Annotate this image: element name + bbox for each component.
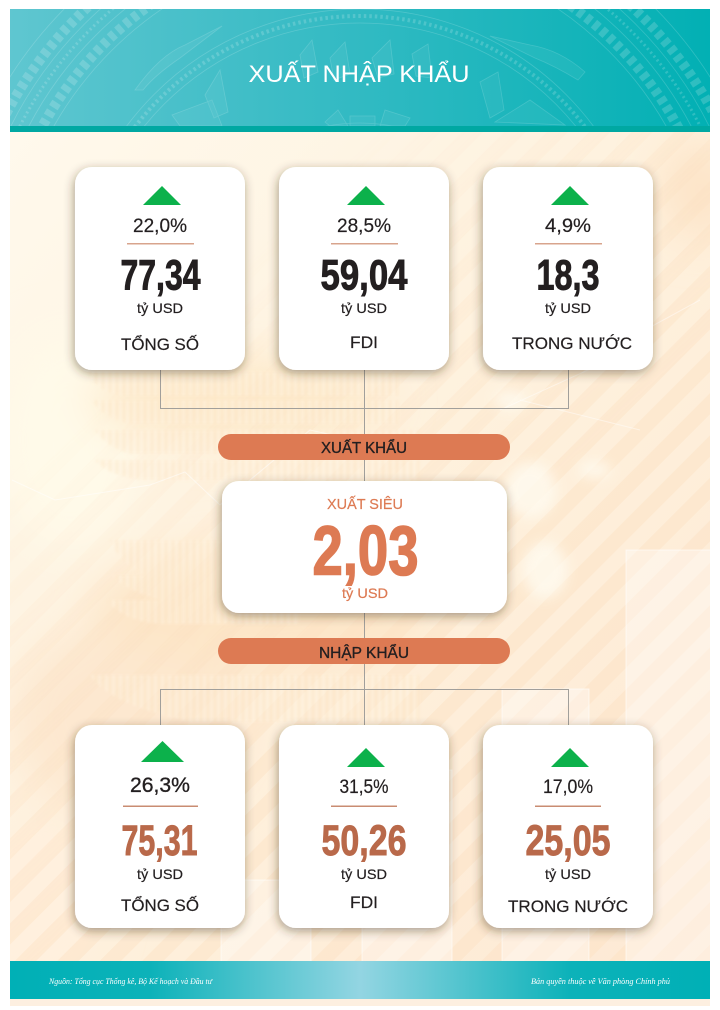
translucent bars [221, 550, 716, 970]
icon: up triangle [347, 748, 385, 767]
surplus label: XUẤT SIÊU [327, 496, 403, 513]
unit: tỷ USD [545, 300, 591, 316]
bottom strip [10, 999, 710, 1006]
card: export FDI [279, 167, 449, 370]
category label: TỔNG SỐ [121, 895, 199, 915]
value: 50,26 [322, 817, 406, 865]
percent change: 31,5% [340, 777, 389, 798]
title: XUẤT NHẬP KHẨU [248, 60, 470, 88]
percent change: 26,3% [130, 774, 190, 797]
pill: import heading [218, 638, 510, 664]
source note: Nguồn: Tổng cục Thống kê, Bộ Kế hoạch và Đầu tư [48, 976, 213, 986]
card: trade surplus [222, 481, 507, 613]
icon: up triangle [551, 186, 589, 205]
card: export domestic [483, 167, 653, 370]
percent change: 22,0% [133, 215, 187, 237]
card: import total [75, 725, 245, 928]
unit: tỷ USD [341, 300, 387, 316]
percent change: 28,5% [337, 215, 391, 237]
value: 75,31 [122, 817, 198, 865]
connector lines: import [160, 690, 568, 728]
pill: import heading: NHẬP KHẨU [319, 644, 409, 662]
copyright note: Bản quyền thuộc về Văn phòng Chính phủ [531, 976, 670, 986]
value: 25,05 [526, 817, 610, 865]
icon: up triangle [143, 186, 181, 205]
card: export total [75, 167, 245, 370]
category label: TRONG NƯỚC [512, 334, 632, 353]
pill: export heading: XUẤT KHẨU [321, 439, 407, 457]
bronze drum pattern [10, 9, 710, 126]
icon: up triangle [551, 748, 589, 767]
stylised chart lines [12, 430, 329, 506]
header banner [10, 9, 710, 132]
connector lines: export [160, 368, 568, 728]
category label: FDI [350, 893, 378, 912]
icon: up triangle [347, 186, 385, 205]
footer bar [10, 961, 710, 999]
value: 77,34 [120, 252, 201, 300]
unit: tỷ USD [341, 866, 387, 882]
surplus unit: tỷ USD [342, 585, 388, 601]
pill: export heading [218, 434, 510, 460]
icon: up triangle [141, 741, 184, 762]
unit: tỷ USD [137, 300, 183, 316]
coin stacks [88, 372, 420, 722]
value: 18,3 [536, 252, 600, 300]
percent change: 4,9% [545, 215, 591, 237]
category label: FDI [350, 333, 378, 352]
unit: tỷ USD [137, 866, 183, 882]
card: import FDI [279, 725, 449, 928]
surplus value: 2,03 [312, 512, 418, 590]
percent change: 17,0% [543, 777, 593, 798]
category label: TỔNG SỐ [121, 334, 199, 354]
unit: tỷ USD [545, 866, 591, 882]
card: import domestic [483, 725, 653, 928]
value: 59,04 [320, 252, 408, 300]
header underline band [10, 126, 710, 132]
category label: TRONG NƯỚC [508, 897, 628, 916]
diagonal stripes background [10, 240, 710, 961]
